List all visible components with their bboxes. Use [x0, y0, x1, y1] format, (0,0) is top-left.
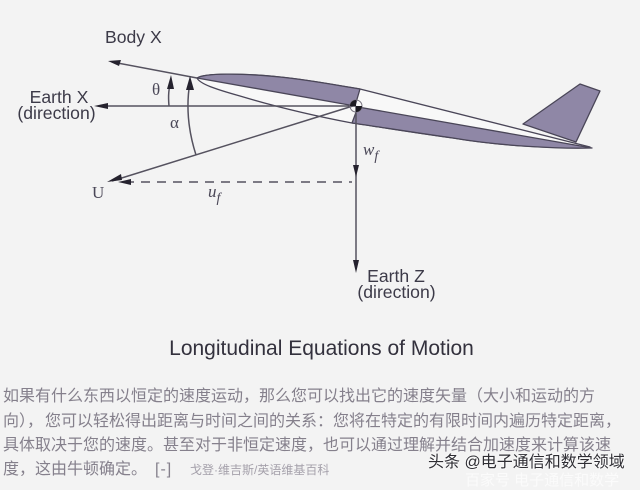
symbols: f — [374, 149, 380, 164]
paragraph text — [3, 387, 621, 478]
aircraft wing and tail — [197, 74, 600, 148]
arrowheads — [94, 60, 359, 273]
centre of gravity marker — [350, 100, 362, 112]
axis lines — [100, 62, 356, 262]
faint white watermark: 百家号 电子通信和数学 — [465, 472, 619, 489]
diagram title: Longitudinal Equations of Motion — [169, 337, 474, 360]
paragraph text: 度，这由牛顿确定。 [-] — [3, 461, 172, 478]
source credit: 戈登·维吉斯/英语维基百科 — [190, 463, 329, 477]
symbols: θ — [152, 80, 160, 99]
labels: (direction) — [17, 103, 96, 123]
symbols: U — [92, 183, 104, 202]
symbols: w — [363, 140, 374, 159]
watermark: 头条 @电子通信和数学领域 — [428, 454, 625, 471]
paragraph text: 如果有什么东西以恒定的速度运动，那么您可以找出它的速度矢量（大小和运动的方 — [3, 388, 595, 405]
symbols: f — [216, 191, 222, 206]
labels: Body X — [105, 27, 162, 47]
paragraph text: 具体取决于您的速度。甚至对于非恒定速度，也可以通过理解并结合加速度来计算该速 — [3, 437, 611, 454]
labels: (direction) — [357, 282, 436, 302]
symbols: u — [208, 182, 216, 201]
symbols — [92, 80, 380, 206]
paragraph text: 向），您可以轻松得出距离与时间之间的关系：您将在特定的有限时间内遍历特定距离， — [3, 412, 621, 430]
labels: Earth Z — [367, 266, 425, 286]
symbols: α — [170, 113, 179, 132]
labels — [17, 27, 436, 302]
labels: Earth X — [30, 87, 89, 107]
